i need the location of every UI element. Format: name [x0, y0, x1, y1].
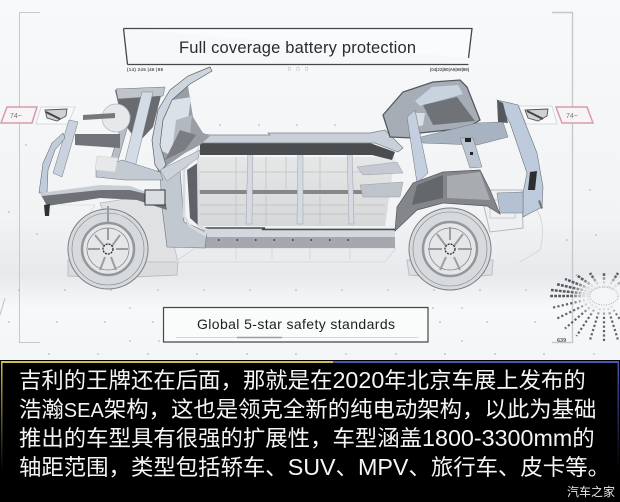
- cross members vertical: [246, 148, 354, 224]
- page number: 639: [557, 338, 566, 344]
- battery floor: [197, 157, 395, 226]
- caption panel: [0, 360, 620, 502]
- upper sill rail: [198, 130, 403, 152]
- caption text: 吉利的王牌还在后面，那就是在2020年北京车展上发布的: [19, 367, 586, 393]
- rear tower shell: [383, 80, 480, 138]
- upper dark rays: [549, 272, 620, 296]
- front tow hook: [44, 204, 50, 216]
- rear tower window: [415, 85, 463, 106]
- engine rail two: [110, 113, 131, 164]
- caption border: [1, 361, 619, 471]
- rear upper beam: [417, 122, 508, 145]
- arch light panels: [447, 172, 490, 200]
- engine rail one: [122, 92, 153, 176]
- rear inner panel one: [357, 162, 403, 175]
- badge: right shield: [519, 106, 557, 124]
- small codes: [127, 66, 469, 72]
- title text: Full coverage battery protection: [179, 39, 416, 57]
- rear lower beam: [497, 192, 523, 213]
- front bumper arc: [39, 133, 65, 193]
- caption text: 轴距范围，类型包括轿车、SUV、MPV、旅行车、皮卡等。: [19, 454, 610, 480]
- center pillar: [160, 170, 207, 248]
- strut hole: [465, 138, 473, 155]
- shock tower dome: [413, 113, 425, 128]
- caption text: 推出的车型具有很强的扩展性，车型涵盖1800-3300mm的: [19, 425, 595, 451]
- dot grid: [8, 124, 597, 355]
- caption text: [19, 367, 610, 480]
- small codes: □ □ □: [288, 66, 308, 72]
- rear end rail: [497, 100, 543, 217]
- battery dark upper band: [200, 143, 395, 160]
- badge: left shield: [36, 107, 75, 124]
- bottom box: [164, 308, 428, 342]
- centre fade: [570, 274, 620, 318]
- lower sill: [203, 228, 395, 237]
- wheel: rear right ghost: [407, 190, 542, 290]
- lower sill dark face: [203, 237, 395, 248]
- side rail highlight: [40, 185, 163, 198]
- watermark: 汽车之家: [567, 484, 615, 499]
- badge: left 74: 74~: [10, 113, 22, 120]
- dot radial: [549, 272, 620, 342]
- corner mark: [0, 298, 5, 315]
- front tower top: [116, 87, 165, 99]
- rear vertical rail: [407, 110, 428, 183]
- rear tower inner floor: [423, 97, 475, 125]
- small codes: (14) 245 |46 |88: [127, 67, 163, 72]
- title box: [124, 28, 472, 64]
- frame lines: [20, 12, 572, 342]
- small codes: |04|22|80|A5|68|98|: [430, 67, 469, 72]
- chassis: [39, 67, 543, 262]
- sill holes: [218, 239, 360, 241]
- badge: right 74: [556, 107, 593, 123]
- sill top line: [205, 228, 395, 230]
- rear rail top dark: [497, 100, 508, 123]
- front long rail: [53, 120, 78, 177]
- rear cross pin: [538, 200, 543, 209]
- front side rail: [40, 187, 167, 210]
- pillar back panel: [153, 67, 210, 172]
- arch dark inner: [412, 175, 443, 205]
- dash panel shards: [160, 97, 191, 155]
- caption text: 浩瀚SEA架构，这也是领克全新的纯电动架构，以此为基础: [19, 397, 596, 422]
- badge: right 74: 74~: [566, 113, 578, 120]
- rear strut: [460, 138, 482, 168]
- ghost floor under sill: [175, 248, 396, 262]
- engine cross brace: [96, 160, 163, 180]
- A-pillar arch: [152, 67, 212, 172]
- fender ghost: [102, 104, 130, 132]
- bottom box text: Global 5-star safety standards: [197, 316, 395, 332]
- mount bracket: [145, 190, 165, 205]
- door opening pale ring: [184, 150, 207, 235]
- wheel: front left ghost: [60, 198, 178, 289]
- upper box rail: [75, 134, 120, 148]
- floor seams: [197, 157, 390, 226]
- badge: left 74: [1, 107, 37, 123]
- centre ring: [590, 287, 618, 305]
- rear wheel arch: [395, 170, 500, 231]
- cross member horizontal: [198, 190, 365, 194]
- background panel: [0, 0, 620, 362]
- front tower block: [115, 88, 163, 143]
- rear rail dark box: [528, 171, 537, 190]
- ghost block: [95, 156, 118, 172]
- door opening dark: [187, 162, 199, 226]
- rear inner panel two: [360, 182, 403, 197]
- lower rays: [551, 299, 620, 342]
- upper dark beam: [83, 113, 115, 120]
- lower strut: [160, 150, 200, 181]
